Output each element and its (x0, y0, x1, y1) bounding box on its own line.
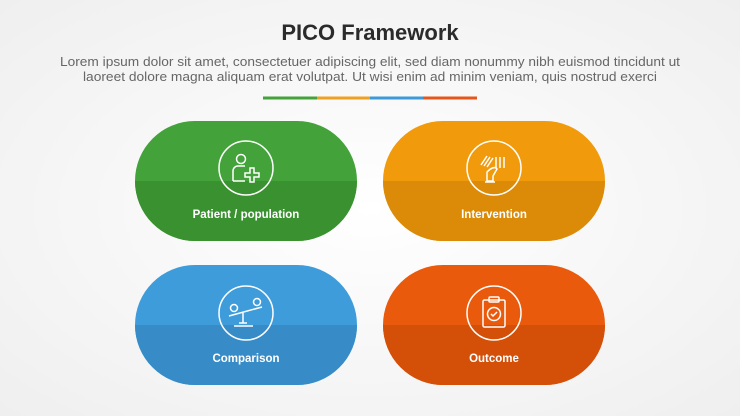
subtitle text (60, 54, 680, 84)
panel: comparison (135, 265, 357, 385)
title: PICO Framework (281, 20, 459, 45)
panel: outcome (383, 265, 605, 385)
panel: intervention (383, 121, 605, 241)
icon: person plus (219, 141, 273, 195)
panel: comparison: Comparison (212, 353, 280, 365)
icon: clipboard check (467, 286, 521, 340)
panel: patient (135, 121, 357, 241)
panel: outcome: Outcome (469, 353, 519, 365)
subtitle text: Lorem ipsum dolor sit amet, consectetuer adipiscing elit, sed diam nonummy nibh euismod tincidunt ut (60, 54, 680, 69)
icon: seesaw (219, 286, 273, 340)
panel: intervention: Intervention (461, 209, 527, 221)
panel: patient: Patient / population (193, 209, 299, 221)
divider line (263, 96, 477, 100)
subtitle text: laoreet dolore magna aliquam erat volutpat. Ut wisi enim ad minim veniam, quis nostrud exerci (83, 69, 657, 84)
icon: hand with bars (467, 141, 521, 195)
